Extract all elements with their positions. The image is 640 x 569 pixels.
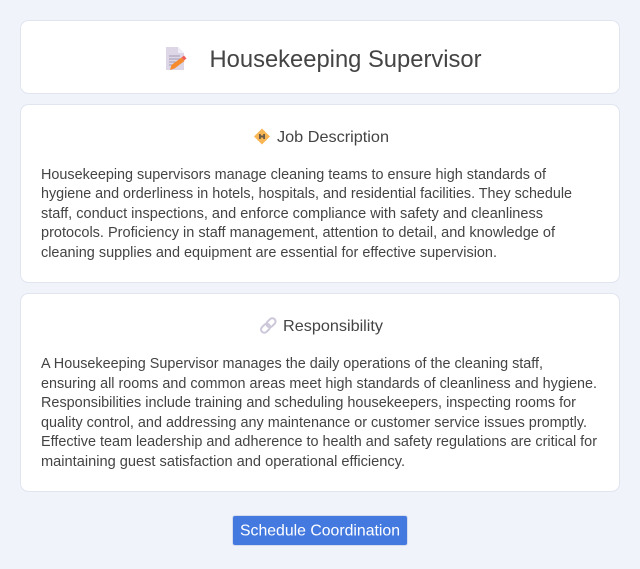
panel: responsibility: [20, 294, 620, 492]
responsibility text: quality control, and addressing any maintenance or customer service issues promptly.: [41, 415, 587, 431]
job description text: hygiene and orderliness in hotels, hospitals, and residential facilities. They schedule: [41, 186, 572, 202]
heading: responsibility: Responsibility: [283, 318, 383, 335]
icon: document with pencil: [166, 47, 186, 70]
job description text: staff, conduct inspections, and enforce compliance with safety and cleanliness: [41, 206, 543, 222]
button: schedule coordination: [232, 516, 408, 546]
icon: orange warning diamond: [254, 128, 270, 144]
panel: title: [20, 20, 620, 94]
icon: chain link: [260, 317, 277, 334]
responsibility text: maintaining guest satisfaction and operational efficiency.: [41, 454, 405, 470]
job description text: [41, 167, 572, 261]
job description text: cleaning supplies and equipment are essential for effective supervision.: [41, 245, 497, 261]
responsibility text: Responsibilities include training and scheduling housekeepers, inspecting rooms for: [41, 395, 576, 411]
responsibility text: Effective team leadership and adherence to health and safety regulations are critical for: [41, 434, 597, 450]
button: schedule coordination: Schedule Coordination: [240, 522, 400, 540]
responsibility text: A Housekeeping Supervisor manages the daily operations of the cleaning staff,: [41, 356, 543, 372]
responsibility text: [41, 356, 597, 470]
job description text: protocols. Proficiency in staff management, attention to detail, and knowledge of: [41, 225, 556, 241]
panel: job description: [20, 104, 620, 282]
title text: Housekeeping Supervisor: [210, 46, 482, 73]
job description text: Housekeeping supervisors manage cleaning teams to ensure high standards of: [41, 167, 547, 183]
responsibility text: ensuring all rooms and common areas meet high standards of cleanliness and hygiene.: [41, 376, 597, 392]
heading: job description: Job Description: [277, 129, 389, 146]
